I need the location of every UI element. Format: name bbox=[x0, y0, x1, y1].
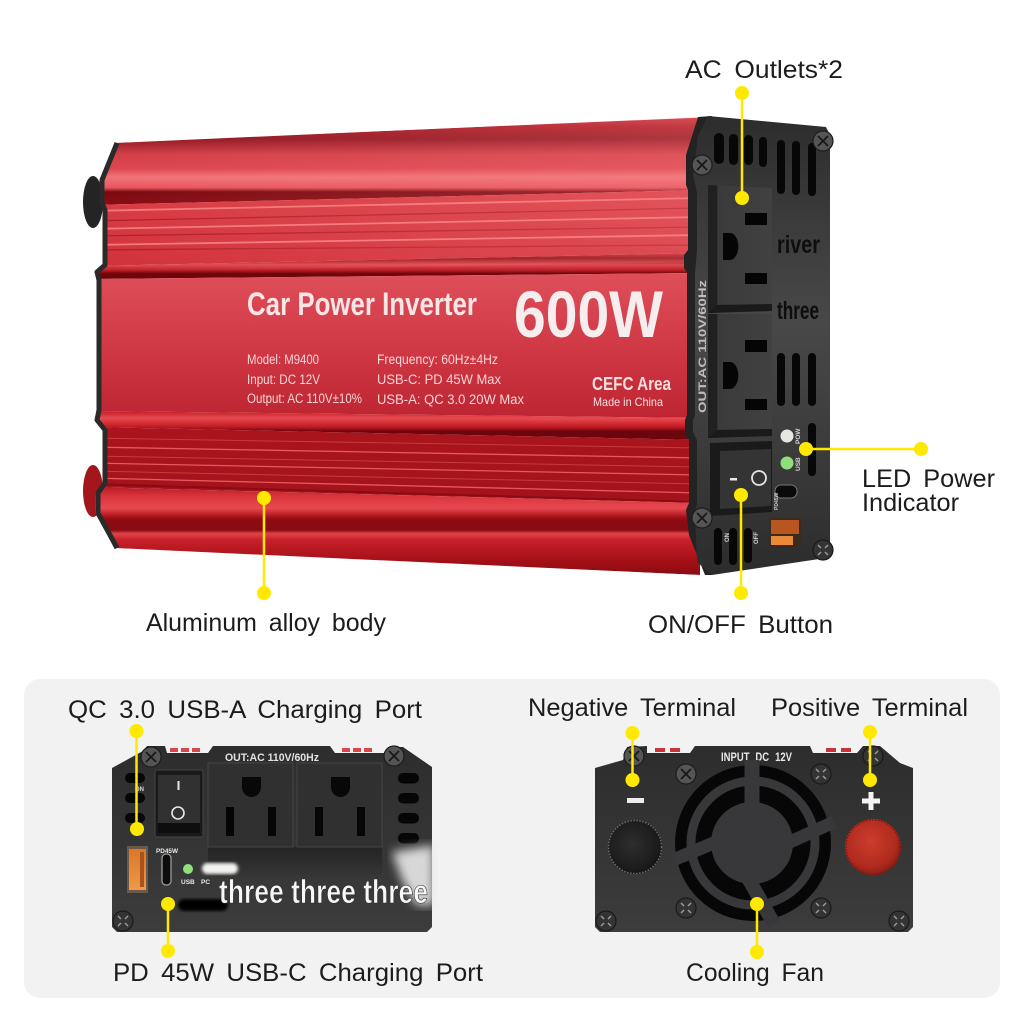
icon: plus sign bbox=[862, 792, 880, 810]
callout: Cooling Fan bbox=[686, 897, 824, 987]
icon: minus sign bbox=[627, 798, 644, 803]
end face plate bbox=[693, 116, 830, 575]
end face black side strip bbox=[684, 116, 712, 575]
spec block left: Output: AC 110V±10% bbox=[247, 391, 362, 406]
callout: Cooling Fan: Cooling Fan bbox=[686, 959, 824, 987]
device: fan side view bbox=[595, 746, 913, 932]
lower vent slots bbox=[714, 353, 816, 565]
callout: AC Outlets bbox=[685, 56, 843, 205]
callout: LED Power Indicator: LED Power bbox=[862, 465, 995, 493]
USB-C port on end face bbox=[774, 485, 797, 510]
callout: Positive Terminal bbox=[771, 694, 968, 787]
ON and OFF labels: OFF bbox=[754, 532, 760, 544]
callout: QC 3.0 USB-A Charging Port: QC 3.0 USB-A Charging Port bbox=[68, 696, 422, 724]
spec block left bbox=[247, 352, 362, 406]
icon: positive red knob bbox=[845, 819, 901, 875]
callout: Negative Terminal: Negative Terminal bbox=[528, 694, 736, 722]
screws on end face bbox=[692, 131, 833, 560]
CEFC Area mark: Made in China bbox=[593, 395, 663, 409]
CEFC Area mark: CEFC Area bbox=[592, 374, 672, 394]
CEFC Area mark bbox=[592, 374, 672, 409]
shadow beneath outlets bbox=[208, 847, 382, 879]
heading: OUT:AC 110V/60Hz: OUT:AC 110V/60Hz bbox=[225, 752, 319, 764]
ON and OFF labels bbox=[725, 532, 760, 544]
right vent slots bbox=[398, 773, 419, 844]
callout: Aluminum alloy body bbox=[146, 491, 386, 637]
icon: cooling fan grille bbox=[673, 760, 834, 924]
ON label: ON bbox=[135, 787, 144, 793]
overlay text: river: river bbox=[777, 231, 820, 259]
ON/OFF rocker switch bbox=[710, 441, 772, 516]
USB-A port orange bbox=[127, 846, 148, 893]
screws bbox=[596, 746, 909, 931]
main inverter product image bbox=[83, 116, 833, 575]
POW LED, partly covered bbox=[201, 863, 238, 886]
USB-C port on end face: PD45W bbox=[774, 492, 780, 510]
icon: rear red terminal knob bbox=[83, 465, 103, 517]
LED indicators bbox=[780, 428, 802, 471]
AC outlet right bbox=[297, 763, 382, 847]
spec block right: USB-C: PD 45W Max bbox=[377, 372, 501, 387]
callout: PD 45W USB-C Charging Port: PD 45W USB-C Charging Port bbox=[113, 959, 483, 987]
callout: QC 3.0 USB-A Charging Port bbox=[68, 696, 422, 836]
red rear fin peeks bbox=[170, 748, 372, 752]
glitched pale patch bbox=[392, 845, 434, 905]
panel: bottom views background bbox=[24, 679, 1000, 998]
USB LED: USB bbox=[181, 879, 195, 886]
body text: Car Power Inverter: Car Power Inverter bbox=[247, 286, 477, 322]
callout: LED Power Indicator bbox=[799, 442, 995, 517]
USB LED bbox=[181, 864, 195, 886]
body text: 600W: 600W bbox=[514, 277, 664, 351]
spec block left: Model: M9400 bbox=[247, 352, 319, 367]
lower cooling fins bbox=[90, 427, 700, 503]
spec block right bbox=[377, 352, 524, 407]
lower divider rib bbox=[90, 411, 700, 440]
LED indicators: POW bbox=[795, 428, 802, 444]
icon: rear black terminal knob bbox=[83, 176, 103, 228]
callout: Aluminum alloy body: Aluminum alloy body bbox=[146, 609, 386, 637]
heading: INPUT DC 12V: INPUT DC 12V bbox=[721, 752, 792, 764]
spec block left: Input: DC 12V bbox=[247, 372, 320, 387]
POW LED, partly covered: PC bbox=[201, 879, 210, 886]
device plate bbox=[112, 746, 432, 932]
callout: Negative Terminal bbox=[528, 694, 736, 787]
callout: PD 45W USB-C Charging Port bbox=[113, 897, 483, 987]
callout: ON/OFF Button: ON/OFF Button bbox=[648, 611, 833, 639]
upper cooling fins bbox=[90, 190, 700, 266]
pink sheen on upper section bbox=[236, 117, 698, 268]
PD45W label: PD45W bbox=[156, 848, 179, 855]
LED indicators: USB bbox=[795, 457, 802, 471]
body left dark edge bbox=[97, 143, 117, 548]
upper rounded band bbox=[90, 118, 700, 205]
callout: AC Outlets: AC Outlets*2 bbox=[685, 56, 843, 84]
left vent slots bbox=[125, 773, 145, 823]
front label panel bbox=[90, 273, 700, 418]
callout: LED Power Indicator: Indicator bbox=[862, 489, 959, 517]
rocker switch bbox=[155, 770, 203, 837]
callout: Positive Terminal: Positive Terminal bbox=[771, 694, 968, 722]
AC outlet left bbox=[208, 763, 293, 847]
red rear fin peeks bbox=[655, 748, 851, 752]
top vent slots bbox=[714, 133, 816, 196]
spec block right: Frequency: 60Hz±4Hz bbox=[377, 352, 498, 367]
vertical text: OUT:AC 110V/60Hz: OUT:AC 110V/60Hz bbox=[697, 279, 709, 413]
AC outlet 1 bbox=[708, 185, 772, 313]
device: outlet side view bbox=[112, 746, 434, 932]
lower rounded band bbox=[90, 487, 700, 575]
upper divider rib bbox=[90, 253, 700, 279]
end face bbox=[684, 116, 833, 575]
callout: ON/OFF Button bbox=[648, 488, 833, 639]
ON and OFF labels: ON bbox=[725, 533, 731, 542]
screws bbox=[113, 746, 404, 931]
overlay text: three: three bbox=[777, 297, 819, 325]
black slot bbox=[178, 899, 228, 911]
aluminum alloy body bbox=[90, 117, 700, 575]
AC outlet 2 bbox=[708, 314, 772, 438]
icon: negative black knob bbox=[608, 820, 662, 874]
USB-C port bbox=[162, 854, 171, 885]
overlay text: three three three: three three three bbox=[219, 873, 428, 910]
USB-A orange port on end face bbox=[769, 518, 801, 547]
spec block right: USB-A: QC 3.0 20W Max bbox=[377, 392, 524, 407]
device plate bbox=[595, 746, 913, 932]
